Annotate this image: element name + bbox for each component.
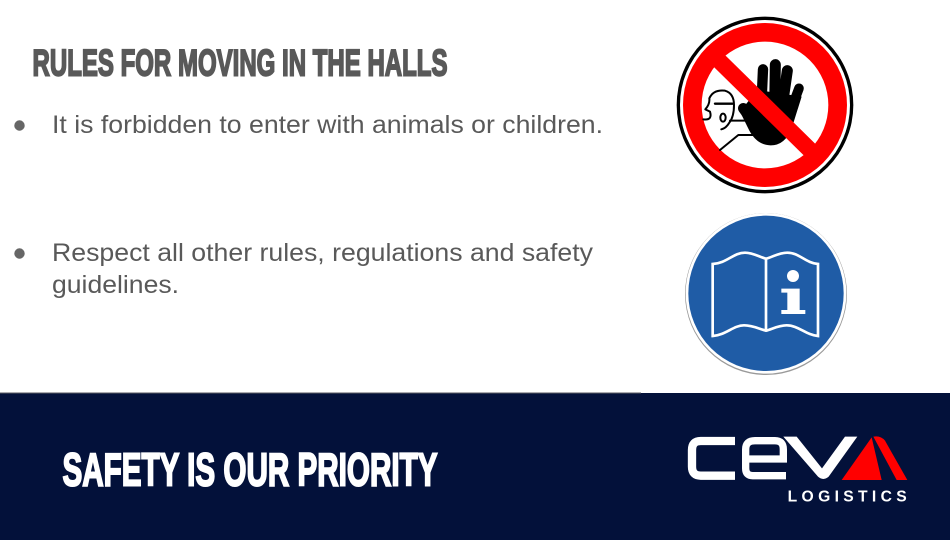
icon detail: raised hand: [740, 65, 802, 145]
icon detail: person: [703, 90, 753, 150]
bullet: rules and guidelines: [14, 239, 594, 299]
logo wordmark: logistics: LOGISTICS: [788, 489, 907, 506]
title: RULES FOR MOVING IN THE HALLS: [32, 42, 448, 84]
footer slogan: SAFETY IS OUR PRIORITY: [62, 444, 437, 496]
logo letters: cev: [692, 437, 857, 479]
icon: read the manual information sign: [685, 213, 847, 375]
logo mark: red triangle: [842, 436, 907, 480]
icon detail: prohibition bar: [717, 58, 812, 152]
icon detail: open book: [713, 253, 818, 336]
icon: no entry stop hand sign: [677, 17, 853, 193]
bullet: animals or children: It is forbidden to enter with animals or children.: [52, 111, 603, 139]
icon detail: letter i: [781, 270, 805, 314]
bullet: rules and guidelines: guidelines.: [52, 271, 179, 299]
footer band: [0, 392, 950, 540]
bullet: rules and guidelines: Respect all other rules, regulations and safety: [52, 239, 594, 267]
logo: CEVA Logistics: [692, 436, 907, 506]
